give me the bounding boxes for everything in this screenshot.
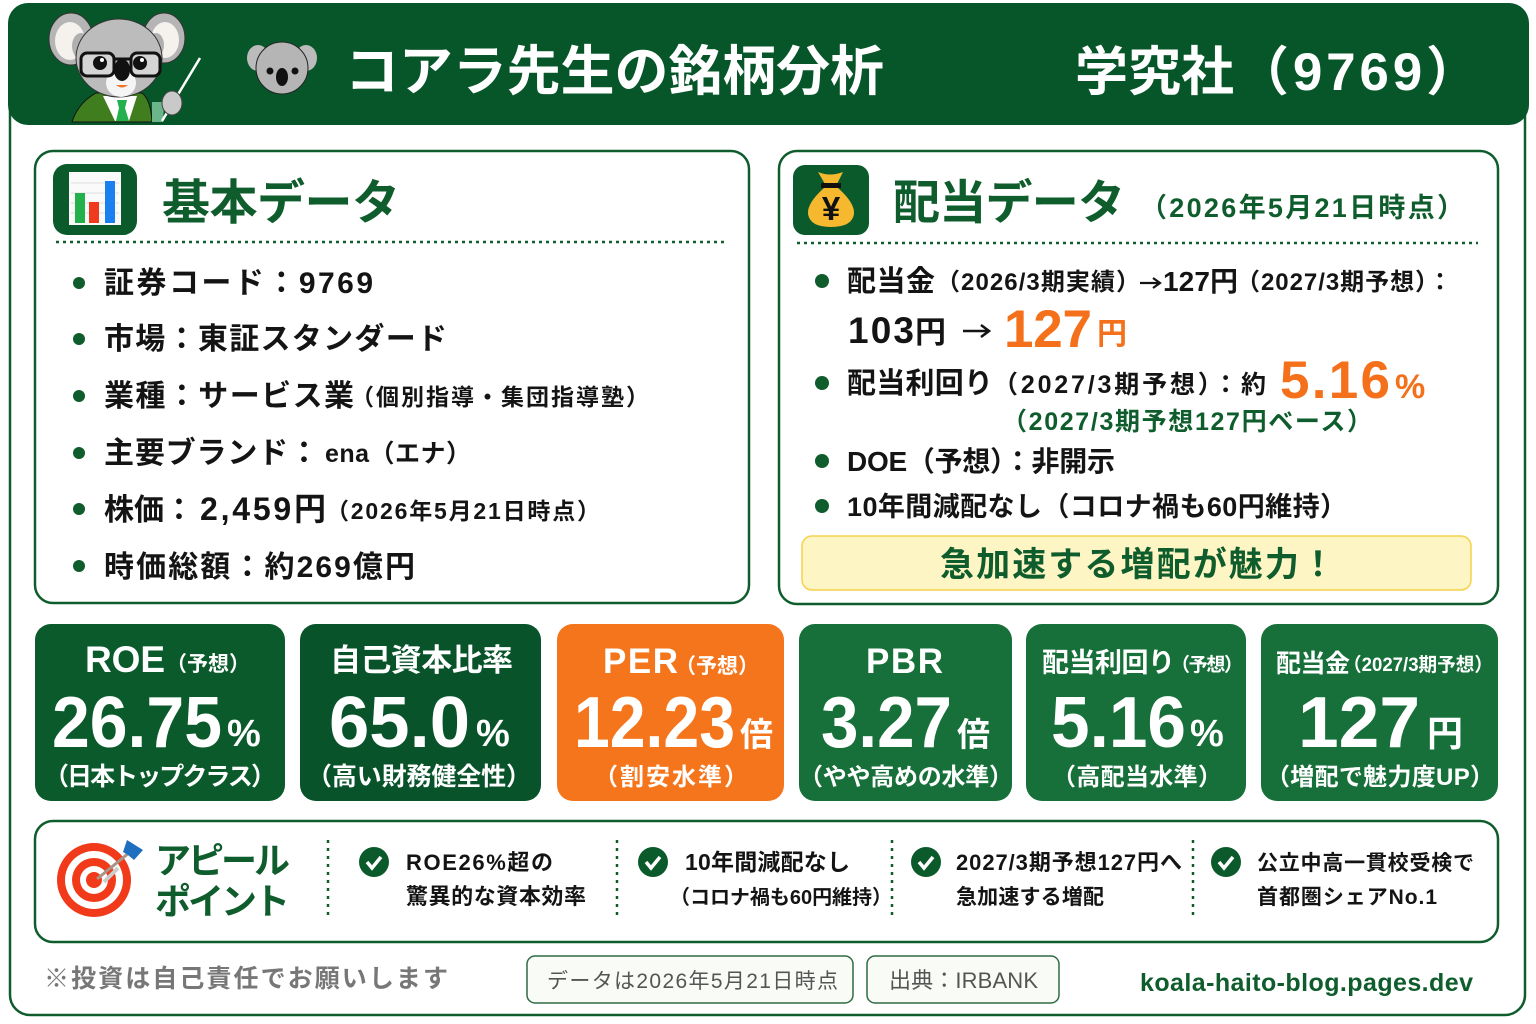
list: dividend data: （2027/3期予想）：約 bbox=[993, 371, 1266, 399]
KPI card: ROE: （予想） bbox=[166, 653, 250, 676]
KPI card: PER: （予想） bbox=[675, 655, 759, 678]
list: basic data: 株価： bbox=[104, 494, 194, 527]
list: dividend data: 配当金 bbox=[847, 265, 935, 298]
KPI card: PER: PER bbox=[603, 642, 678, 681]
list: basic data: 2,459円 bbox=[200, 491, 326, 527]
point: rapid increase bbox=[911, 847, 1182, 909]
list: basic data: ena（エナ） bbox=[325, 440, 471, 468]
list: dividend data: DOE（予想）：非開示 bbox=[847, 446, 1115, 477]
company name: （9769） bbox=[1236, 43, 1479, 102]
KPI card: PER: （割安水準） bbox=[594, 764, 748, 791]
icon: target bbox=[57, 840, 143, 917]
KPI card: dividend yield: 5.16 bbox=[1051, 683, 1186, 763]
KPI card: dividend yield: （予想） bbox=[1171, 654, 1243, 676]
icon: koala face bbox=[247, 42, 317, 94]
disclaimer: ※投資は自己責任でお願いします bbox=[44, 965, 448, 993]
point: no cuts: 10年間減配なし bbox=[685, 849, 850, 875]
point: market share: 首都圏シェアNo.1 bbox=[1257, 886, 1437, 909]
header band bbox=[8, 3, 1529, 125]
heading: 配当データ bbox=[893, 176, 1125, 229]
KPI card: dividend yield: 配当利回り bbox=[1042, 648, 1175, 678]
list: dividend data: 円 bbox=[915, 315, 946, 350]
panel: appeal points: ポイント bbox=[155, 881, 290, 922]
arrow: small bbox=[1140, 278, 1160, 288]
KPI card: PBR: 3.27 bbox=[821, 683, 952, 763]
list: basic data: （個別指導・集団指導塾） bbox=[351, 384, 649, 410]
icon: bar chart bbox=[53, 164, 137, 235]
list: dividend data: 円 bbox=[1097, 318, 1127, 351]
KPI card: equity ratio: 自己資本比率 bbox=[330, 643, 513, 678]
KPI card: equity ratio: % bbox=[476, 713, 510, 755]
list: dividend data bbox=[815, 265, 1452, 522]
company name: 学究社 bbox=[1075, 43, 1234, 102]
KPI card: PBR: （やや高めの水準） bbox=[799, 764, 1013, 791]
list: dividend data: 配当利回り bbox=[847, 367, 993, 400]
point: ROE: ROE26%超の bbox=[406, 850, 553, 875]
arrow: large bbox=[963, 325, 989, 337]
site url: koala-haito-blog.pages.dev bbox=[1140, 969, 1473, 997]
list: basic data: 主要ブランド： bbox=[104, 436, 319, 470]
KPI card: equity ratio: （高い財務健全性） bbox=[307, 763, 531, 791]
KPI card: ROE: （日本トップクラス） bbox=[44, 763, 276, 791]
panel: dividend data bbox=[779, 151, 1498, 604]
KPI card: dividend bbox=[1261, 624, 1498, 801]
heading: アピール bbox=[155, 840, 290, 881]
list: basic data: 時価総額：約269億円 bbox=[104, 551, 415, 584]
list: dividend data: （2027/3期予想127円ベース） bbox=[1002, 408, 1372, 436]
KPI card: dividend: 配当金 bbox=[1276, 650, 1350, 678]
KPI card: dividend: （2027/3期予想） bbox=[1343, 654, 1493, 676]
list: basic data: 業種：サービス業 bbox=[104, 380, 354, 413]
list: dividend data: 10年間減配なし（コロナ禍も60円維持） bbox=[847, 492, 1347, 522]
point: rapid increase: 2027/3期予想127円へ bbox=[956, 850, 1182, 875]
KPI card: equity ratio bbox=[300, 624, 541, 801]
list: dividend data: 127円 bbox=[1163, 266, 1238, 297]
KPI card: dividend yield: （高配当水準） bbox=[1052, 764, 1222, 791]
source badge: 出典：IRBANK bbox=[889, 968, 1038, 993]
list: dividend data: 5.16 bbox=[1280, 351, 1390, 410]
KPI card: ROE bbox=[35, 624, 285, 801]
callout bbox=[802, 536, 1471, 590]
callout: 急加速する増配が魅力！ bbox=[940, 545, 1335, 584]
list: dividend data: （2026/3期実績） bbox=[936, 269, 1140, 296]
KPI card: PER: 倍 bbox=[740, 716, 773, 753]
list: dividend data: （2027/3期予想）： bbox=[1236, 269, 1452, 296]
date badge bbox=[527, 956, 853, 1003]
point: no cuts bbox=[638, 847, 892, 909]
icon: money bag: ¥ bbox=[822, 190, 841, 227]
company name bbox=[1075, 43, 1479, 102]
KPI card: dividend yield: % bbox=[1190, 713, 1224, 755]
panel: appeal points bbox=[35, 821, 1498, 942]
list: basic data bbox=[73, 267, 649, 584]
list: basic data: （2026年5月21日時点） bbox=[326, 498, 600, 524]
point: market share: 公立中高一貫校受検で bbox=[1257, 852, 1474, 875]
source badge bbox=[867, 956, 1059, 1003]
list: dividend data: 103 bbox=[848, 310, 914, 351]
KPI card: dividend: 円 bbox=[1427, 713, 1463, 754]
heading: 基本データ bbox=[162, 177, 400, 230]
KPI card: PER: 12.23 bbox=[574, 683, 735, 763]
point: ROE: 驚異的な資本効率 bbox=[406, 884, 586, 909]
title: コアラ先生の銘柄分析 bbox=[345, 42, 884, 102]
KPI card: ROE: 26.75 bbox=[52, 683, 222, 763]
point: no cuts: （コロナ禍も60円維持） bbox=[670, 886, 892, 909]
KPI card: ROE: ROE bbox=[85, 639, 165, 680]
KPI card: dividend: 127 bbox=[1298, 683, 1420, 763]
list: dividend data: 127 bbox=[1004, 300, 1092, 359]
point: rapid increase: 急加速する増配 bbox=[956, 886, 1104, 909]
list: dividend data: % bbox=[1395, 368, 1425, 406]
list: basic data: 証券コード：9769 bbox=[104, 267, 373, 300]
icon: koala teacher bbox=[49, 13, 200, 122]
date note: （2026年5月21日時点） bbox=[1140, 193, 1464, 223]
point: market share bbox=[1211, 847, 1474, 909]
list: basic data: 市場：東証スタンダード bbox=[104, 322, 447, 356]
KPI card: PBR: PBR bbox=[866, 642, 943, 681]
KPI card: PER bbox=[557, 624, 784, 801]
KPI card: equity ratio: 65.0 bbox=[329, 683, 470, 763]
KPI card: PBR: 倍 bbox=[957, 716, 990, 753]
KPI card: ROE: % bbox=[227, 713, 261, 755]
KPI card: PBR bbox=[799, 624, 1013, 801]
KPI card: dividend yield bbox=[1026, 624, 1246, 801]
KPI card: dividend: （増配で魅力度UP） bbox=[1266, 764, 1494, 791]
point: ROE bbox=[359, 847, 586, 909]
panel: basic data bbox=[35, 151, 749, 603]
date badge: データは2026年5月21日時点 bbox=[547, 970, 838, 993]
icon: money bag bbox=[793, 165, 869, 235]
